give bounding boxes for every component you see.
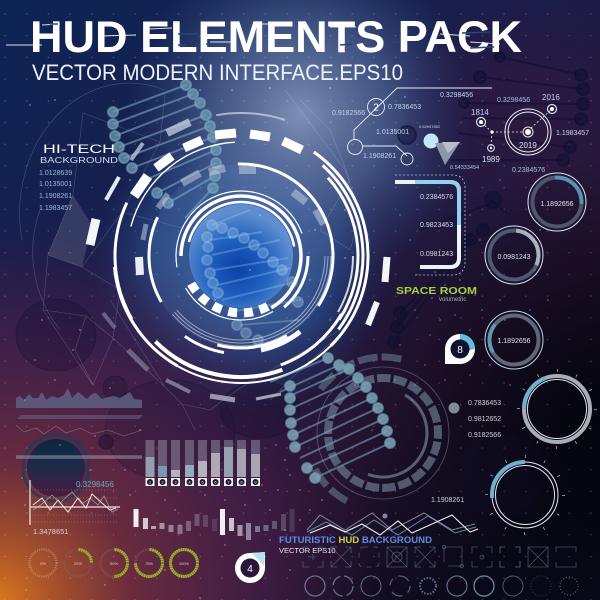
horizontal band <box>16 455 142 459</box>
percent ring 50 <box>100 550 128 576</box>
connector diagram: 2 <box>373 102 379 114</box>
ring gauge 2 <box>485 226 543 284</box>
hi-tech label: 1.1983457 <box>39 205 72 212</box>
hi-tech label <box>39 142 118 212</box>
hi-tech label: 1.0135001 <box>39 181 72 188</box>
pin icon 4 <box>235 552 265 583</box>
level bars: 6 <box>214 480 217 484</box>
percent ring 0 <box>30 550 56 576</box>
dark blobs <box>16 299 545 517</box>
ring gauge 2: 0.0981243 <box>497 254 531 261</box>
level bars <box>146 440 260 486</box>
connector diagram: 0.9182566 <box>332 110 365 117</box>
right value list: 0.7836453 <box>468 400 501 407</box>
line graph <box>30 480 120 536</box>
gray block ring <box>143 168 324 240</box>
percent ring 75 <box>136 550 162 576</box>
futuristic label <box>279 535 432 555</box>
icon row: frames <box>303 545 576 568</box>
level bars: 2 <box>161 480 164 484</box>
timeline ring: 2016 <box>542 93 560 102</box>
area chart <box>16 388 142 408</box>
right value list: 0.9182566 <box>468 432 501 439</box>
futuristic label: FUTURISTIC HUD BACKGROUND <box>279 535 432 546</box>
connector diagram <box>332 88 492 165</box>
line graph: 0.3298456 <box>76 480 114 489</box>
timeline ring: 1.1983457 <box>556 130 589 137</box>
ring gauge 3 <box>481 307 547 373</box>
DNA helix upper <box>108 80 221 218</box>
space room label <box>396 285 477 303</box>
timeline ring: 1814 <box>471 108 489 117</box>
pin icon 8: 8 <box>457 345 463 356</box>
level bars: 8 <box>240 480 243 484</box>
timeline ring: 2019 <box>519 141 537 150</box>
right value list: 1.1908261 <box>431 497 464 504</box>
space room label: SPACE ROOM <box>396 285 477 297</box>
right value list: 0.9812652 <box>468 416 501 423</box>
tick ring upper <box>518 370 596 448</box>
gray outer segments <box>75 90 407 422</box>
central blue disc <box>149 164 333 348</box>
level bars: 5 <box>201 480 204 484</box>
main concentric HUD <box>62 77 420 435</box>
globe wireframe mesh <box>20 83 370 430</box>
DNA helix through disc <box>202 210 303 345</box>
timeline ring <box>471 93 589 174</box>
bracket panel: 0.0981243 <box>420 251 453 258</box>
DNA helix dark top right <box>388 52 589 348</box>
hatched arcs <box>151 166 331 346</box>
timeline ring: 0.2384576 <box>512 167 545 174</box>
line graph: 1.3478651 <box>33 527 68 536</box>
hi-tech label: HI-TECH <box>43 142 115 156</box>
futuristic label: VECTOR EPS10 <box>279 546 336 555</box>
timeline ring: 0.3298456 <box>497 97 530 104</box>
hatch strip <box>17 415 143 419</box>
percent ring 25: 25% <box>74 561 82 566</box>
right value list <box>431 400 501 504</box>
star particles <box>22 70 548 598</box>
connector diagram: 0.7836453 <box>388 104 421 111</box>
percent ring 50: 50% <box>110 561 118 566</box>
bracket panel: 0.9823453 <box>420 222 453 229</box>
percent ring 100 <box>170 550 198 576</box>
DNA helix lower <box>270 353 395 483</box>
triangle icon with circle: 0.54333454 <box>450 165 479 171</box>
white arcs <box>62 77 420 435</box>
percent rings <box>30 550 198 576</box>
level bars: 9 <box>254 480 257 484</box>
thin line chart <box>16 425 142 436</box>
pin icon 8 <box>445 334 475 364</box>
ring gauge 1: 1.1892656 <box>540 201 574 208</box>
level bars: 7 <box>227 480 230 484</box>
inner rings <box>154 169 328 343</box>
triangle icon with circle <box>419 124 479 171</box>
subtitle: VECTOR MODERN INTERFACE.EPS10 <box>32 60 403 85</box>
percent ring 25 <box>64 550 92 576</box>
title: HUD ELEMENTS PACK <box>30 13 522 62</box>
connector diagram: 0.3298456 <box>440 92 473 99</box>
pin icon 4: 4 <box>247 564 253 575</box>
icon row: circles <box>305 576 578 596</box>
level bars: 4 <box>188 480 191 484</box>
percent ring 75: 75% <box>145 561 153 566</box>
percent ring 0: 0% <box>40 561 46 566</box>
triangle icon with circle: 0.62947852 <box>419 124 441 129</box>
hi-tech label: 1.1908261 <box>39 193 72 200</box>
level bars: 3 <box>174 480 177 484</box>
hi-tech label: BACKGROUND <box>40 156 118 165</box>
bracket panel <box>395 175 465 275</box>
connector diagram: 1.1908261 <box>363 153 396 160</box>
zigzag lines <box>307 513 478 535</box>
ring gauge 3: 1.1892656 <box>497 338 531 345</box>
percent ring 100: 100% <box>179 561 190 566</box>
bracket panel: 0.2384576 <box>420 194 453 201</box>
lower ring system <box>277 327 489 539</box>
level bars: 1 <box>149 480 152 484</box>
connector diagram: 1.0135001 <box>376 129 409 136</box>
space room label: volumetric <box>439 297 466 303</box>
hi-tech label: 1.0128639 <box>39 170 72 177</box>
ring gauge 1 <box>528 173 586 231</box>
tick ring lower <box>486 456 564 534</box>
dark circular lens <box>23 435 113 501</box>
candlestick bars <box>134 509 294 540</box>
timeline ring: 1989 <box>482 155 500 164</box>
white block ring <box>134 133 302 275</box>
